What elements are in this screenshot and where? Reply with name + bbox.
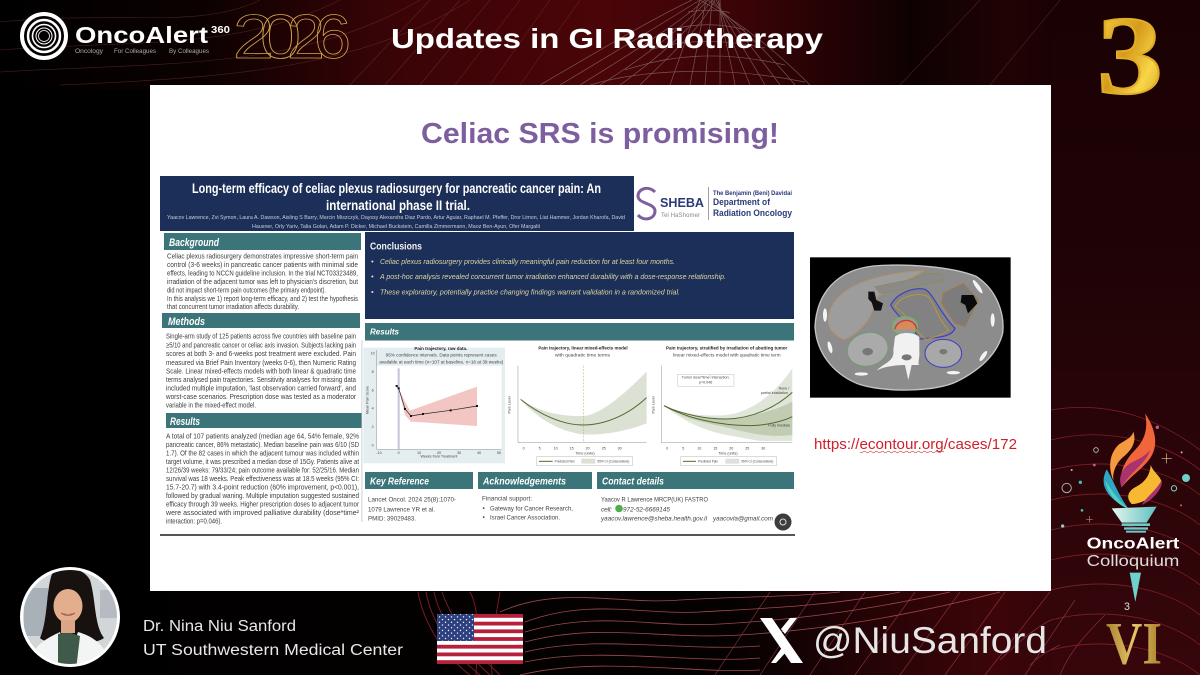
colloquium torch logo: Colloquium — [1087, 553, 1179, 570]
chart: stratified by irradiation: Time (units) — [718, 451, 738, 455]
colloquium torch logo: VI — [1106, 610, 1162, 675]
chart: raw pain trajectory: 50 — [497, 451, 501, 455]
poster section: acknowledgements: Acknowledgements — [482, 476, 566, 488]
poster title block: international phase II trial. — [326, 197, 470, 213]
chart: raw pain trajectory: 0 — [372, 443, 374, 447]
poster section: results text: 1.7). Of the 82 cases in which the adjacent tumour was included within — [166, 448, 359, 458]
chart: raw pain trajectory: 6 — [372, 388, 374, 392]
logo: Sheba department: SHEBA — [660, 195, 705, 210]
poster section: acknowledgements — [478, 472, 592, 522]
poster section: background: that concurrent tumor irradiation affects durability. — [167, 302, 299, 311]
poster section: methods — [162, 313, 360, 410]
panel: conclusions: Conclusions — [370, 242, 422, 252]
chart: linear mixed-effects model: Time (units) — [575, 451, 595, 455]
poster section: results text: efficacy through 39 weeks. Higher prescription doses to adjacent tumor — [166, 500, 359, 508]
poster section: contact details — [597, 472, 794, 530]
poster section: methods: included multiple imputation, 'last observation carried forward', and — [166, 384, 356, 392]
legend: 95% CI (Conservative) — [741, 460, 773, 464]
legend — [681, 457, 777, 466]
speaker name and affiliation — [143, 618, 403, 659]
chart: stratified by irradiation: 0 — [666, 446, 668, 450]
legend: Predicted Pain — [698, 460, 718, 464]
interaction note: Tumor dose*time² interaction: — [682, 376, 730, 380]
poster title block: Yaacov Lawrence, Zvi Symon, Laura A. Dawson, Aisling S Barry, Marcin Miszczyk, Dayssy Alexandra Diaz Pardo, Artur Aguiar, Raphael M. Pfeffer, Dror Limon, Liat Hammer, Jordan Kharofa, David — [167, 215, 625, 221]
poster section: background: irradiation of the adjacent tumor was left to physician's discretion, but — [167, 277, 359, 286]
poster section: acknowledgements: Gateway for Cancer Research, — [490, 506, 573, 512]
panel: conclusions: Celiac plexus radiosurgery provides clinically meaningful pain reduction for at least four months. — [380, 257, 675, 266]
link: econtour case: https://econtour.org/cases/172 — [814, 437, 1017, 453]
poster section: methods: Single-arm study of 125 patients across five countries with baseline pain — [166, 332, 356, 340]
chart: stratified by irradiation: 25 — [745, 446, 749, 450]
logo: OncoAlert 360 — [22, 14, 230, 58]
chart: raw pain trajectory: -10 — [376, 451, 382, 455]
panel: conclusions: • — [371, 288, 374, 296]
poster section: results header — [365, 323, 794, 340]
legend — [537, 457, 633, 466]
poster title block — [160, 176, 634, 231]
chart: stratified by irradiation — [652, 345, 792, 466]
chart: raw pain trajectory: available at each time (n=107 at baseline, n=16 at 39 weeks) — [379, 360, 504, 366]
portrait: speaker — [20, 567, 120, 670]
poster section: background: did not impact short-term pain outcomes (the primary endpoint). — [167, 286, 326, 294]
chart: raw pain trajectory: 0 — [398, 451, 400, 455]
poster section: contact details: yaacovla@gmail.com — [712, 516, 773, 522]
colloquium torch logo: OncoAlert — [1087, 535, 1180, 552]
icon: X — [760, 618, 803, 663]
chart: raw pain trajectory: 10 — [371, 352, 375, 356]
logo: OncoAlert 360: For Colleagues — [114, 48, 157, 55]
logo: OncoAlert 360: By Colleagues — [169, 48, 210, 55]
poster section: key reference: PMID: 39029483. — [368, 516, 416, 522]
poster section: contact details: yaacov.lawrence@sheba.health.gov.il — [600, 516, 708, 522]
poster section: methods: measured via Brief Pain Inventory (weeks 0-6), then Numeric Rating — [166, 358, 356, 367]
panel: white slide — [150, 85, 1051, 591]
decorative sparks — [1061, 426, 1190, 528]
poster section: methods: ≥5/10 and pancreatic cancer or celiac axis invasion. Subjects lacking pain — [166, 340, 356, 350]
chart: stratified by irradiation: 5 — [682, 446, 684, 450]
year 2026: 6 — [314, 3, 351, 72]
chart: stratified by irradiation: 20 — [729, 446, 733, 450]
chart: stratified by irradiation: 30 — [761, 446, 765, 450]
icon: concentric rings — [22, 14, 66, 58]
poster section: results text: A total of 107 patients analyzed (median age 64, 54% female, 92% — [166, 432, 359, 440]
poster section: results text: Results — [170, 416, 200, 428]
poster section: methods: Methods — [168, 316, 205, 328]
poster section: acknowledgements: • — [482, 506, 486, 512]
poster section: results header: Results — [370, 326, 399, 336]
legend: 95% CI (Conservative) — [597, 460, 629, 464]
icon: flames — [1104, 413, 1162, 508]
chart: linear mixed-effects model: 5 — [539, 446, 541, 450]
chart: raw pain trajectory: 95% confidence intervals. Data points represent cases — [386, 353, 497, 359]
chart: stratified by irradiation: Pain trajectory, stratified by irradiation of abutting tumor — [666, 345, 787, 351]
year 2026: 2 — [233, 3, 274, 72]
poster section: methods: scores at both 3- and 6-weeks post treatment were excluded. Pain — [166, 349, 356, 358]
poster section: key reference: 1079 Lawrence YR et al. — [368, 506, 435, 514]
logo: OncoAlert 360: 360 — [211, 25, 230, 36]
chart: raw pain trajectory: 10 — [417, 451, 421, 455]
chart: stratified by irradiation: 15 — [713, 446, 717, 450]
chart: linear mixed-effects model: 25 — [602, 446, 606, 450]
poster section: acknowledgements: Financial support: — [482, 496, 532, 502]
chart: raw pain trajectory: 40 — [477, 451, 481, 455]
icon: torch cup — [1112, 507, 1157, 533]
poster section: key reference: Lancet Oncol. 2024 25(8):1070- — [368, 496, 456, 504]
poster section: results text: followed by gradual waning. Multiple imputation suggested sustained — [166, 491, 359, 500]
poster section: background: Background — [169, 237, 219, 249]
chart: linear mixed-effects model: Pain trajectory, linear mixed-effects model — [538, 345, 628, 351]
logo: OncoAlert 360: OncoAlert — [75, 22, 208, 48]
legend: Predicted Pain — [555, 460, 575, 464]
flag: United States — [437, 614, 523, 664]
interaction note — [678, 374, 734, 386]
chart: raw pain trajectory: 30 — [457, 451, 461, 455]
chart: stratified by irradiation: Fully irradiate — [768, 424, 790, 428]
chart: raw pain trajectory: 20 — [437, 451, 441, 455]
poster section: results text: 12/26/39 weeks: 79/33/24; pain outcome available for: 52/25/16. Median — [166, 466, 359, 474]
year 2026: 2 — [287, 3, 325, 72]
poster section: contact details: 972-52-6669145 — [623, 506, 670, 514]
poster section: methods: terms analysed pain trajectories. Sensitivity analyses for missing data — [166, 375, 357, 384]
interaction note: p=0.046 — [699, 381, 712, 385]
chart: raw pain trajectory: Pain trajectory, raw data. — [414, 346, 468, 352]
poster section: results text: 15.7-20.7) with 3.4-point reduction (60% improvement, p<0.001), — [166, 482, 359, 492]
poster section: methods: worst-case scenarios. Prescription dose was tested as a moderator — [165, 392, 356, 401]
poster section: contact details: Contact details — [602, 476, 664, 488]
social handle: @NiuSanford — [813, 620, 1047, 661]
logo: Sheba department: The Benjamin (Beni) Davidai — [713, 191, 792, 197]
poster section: acknowledgements: Israel Cancer Association. — [490, 514, 560, 522]
chart: linear mixed-effects model: 15 — [570, 446, 574, 450]
chart: raw pain trajectory: Weeks from Treatment — [421, 454, 457, 458]
poster section: results text — [165, 413, 362, 526]
poster section: background: control (3-6 weeks) in pancreatic cancer patients with minimal side — [167, 260, 358, 269]
main heading: Updates in GI Radiotherapy — [391, 23, 824, 54]
panel: conclusions: • — [371, 257, 374, 266]
CT scan image — [810, 257, 1011, 398]
chart: raw pain trajectory: 8 — [372, 370, 374, 374]
poster section: methods: Scale. Linear mixed-effects models with both linear & quadratic time — [166, 366, 356, 376]
chart: linear mixed-effects model: with quadratic time terms — [555, 353, 610, 359]
decorative web — [540, 0, 810, 85]
speaker name and affiliation: UT Southwestern Medical Center — [143, 642, 403, 659]
chart: stratified by irradiation: 10 — [697, 446, 701, 450]
year 2026 — [233, 3, 351, 72]
chart: stratified by irradiation: partial irradiation — [761, 391, 788, 395]
poster section: background: Celiac plexus radiosurgery demonstrates impressive short-term pain — [167, 252, 358, 260]
chart: raw pain trajectory: Mean Pain Score — [365, 386, 369, 414]
poster section: acknowledgements: • — [482, 514, 486, 522]
year 2026: 0 — [260, 3, 301, 72]
chart: linear mixed-effects model: 10 — [554, 446, 558, 450]
chart: stratified by irradiation: linear mixed-effects model with quadratic time term — [673, 353, 781, 359]
slide title: Celiac SRS is promising! — [421, 118, 779, 150]
poster section: results text: interaction: p=0.046). — [166, 516, 222, 526]
chart: raw pain trajectory — [363, 346, 505, 463]
chart: linear mixed-effects model: Pain Level — [507, 396, 511, 414]
poster title block: Long-term efficacy of celiac plexus radiosurgery for pancreatic cancer pain: An — [192, 180, 601, 196]
panel: conclusions — [365, 232, 794, 319]
logo: OncoAlert 360: Oncology — [75, 48, 104, 55]
panel: conclusions: These exploratory, potentially practice changing findings warrant validation in a randomized trial. — [380, 288, 680, 296]
poster section: key reference — [365, 472, 473, 522]
logo: Sheba department: Department of — [713, 197, 771, 207]
poster section: contact details: Yaacov R Lawrence MRCP(UK) FASTRO — [601, 496, 708, 504]
poster section: results text: survival was 18 weeks. Peak effectiveness was at 18.5 weeks (95% CI: — [166, 474, 359, 483]
logo: Sheba department: Tel HaShomer — [661, 213, 700, 219]
poster section: results text: pancreatic cancer, 86% metastatic). Median baseline pain was 6/10 (SD — [166, 440, 359, 449]
poster section: contact details: cell: — [601, 506, 612, 514]
colloquium torch logo — [1061, 413, 1190, 675]
poster section: background — [164, 233, 361, 311]
chart: stratified by irradiation: Pain Level — [652, 396, 656, 414]
logo: Sheba department: Radiation Oncology — [713, 208, 792, 218]
panel: conclusions: • — [371, 272, 374, 281]
poster section: background: In this analysis we 1) report long-term efficacy, and 2) test the hypothesis — [167, 294, 358, 303]
poster section: background: effects, leading to NCCN guideline inclusion. In the trial NCT03323489, — [167, 268, 358, 278]
speaker name and affiliation: Dr. Nina Niu Sanford — [143, 618, 296, 635]
chart: linear mixed-effects model: 0 — [523, 446, 525, 450]
chart: linear mixed-effects model: 30 — [618, 446, 622, 450]
poster section: results text: target volume, it was prescribed a median dose of 15Gy. Patients alive at — [166, 457, 360, 466]
panel: conclusions: A post-hoc analysis revealed concurrent tumor irradiation enhanced durability with a dose-response relationship. — [379, 272, 726, 281]
chart: linear mixed-effects model — [507, 345, 647, 466]
chart: stratified by irradiation: None / — [779, 386, 790, 390]
colloquium torch logo: 3 — [1124, 601, 1130, 613]
poster section: methods: variable in the mixed-effect model. — [166, 400, 256, 410]
chart: raw pain trajectory: 4 — [372, 407, 374, 411]
logo: Sheba department — [638, 187, 792, 220]
poster section: key reference: Key Reference — [370, 476, 429, 488]
chart: linear mixed-effects model: 20 — [586, 446, 590, 450]
chart: raw pain trajectory: 2 — [372, 425, 374, 429]
poster title block: Hausner, Orly Yariv, Talia Golan, Adam P. Dicker, Michael Buckstein, Camilla Zimmermann, Maoz Ben-Ayun, Ofer Margalit — [252, 224, 540, 230]
poster section: results text: were associated with improved palliative durability (dose*time² — [165, 508, 359, 517]
